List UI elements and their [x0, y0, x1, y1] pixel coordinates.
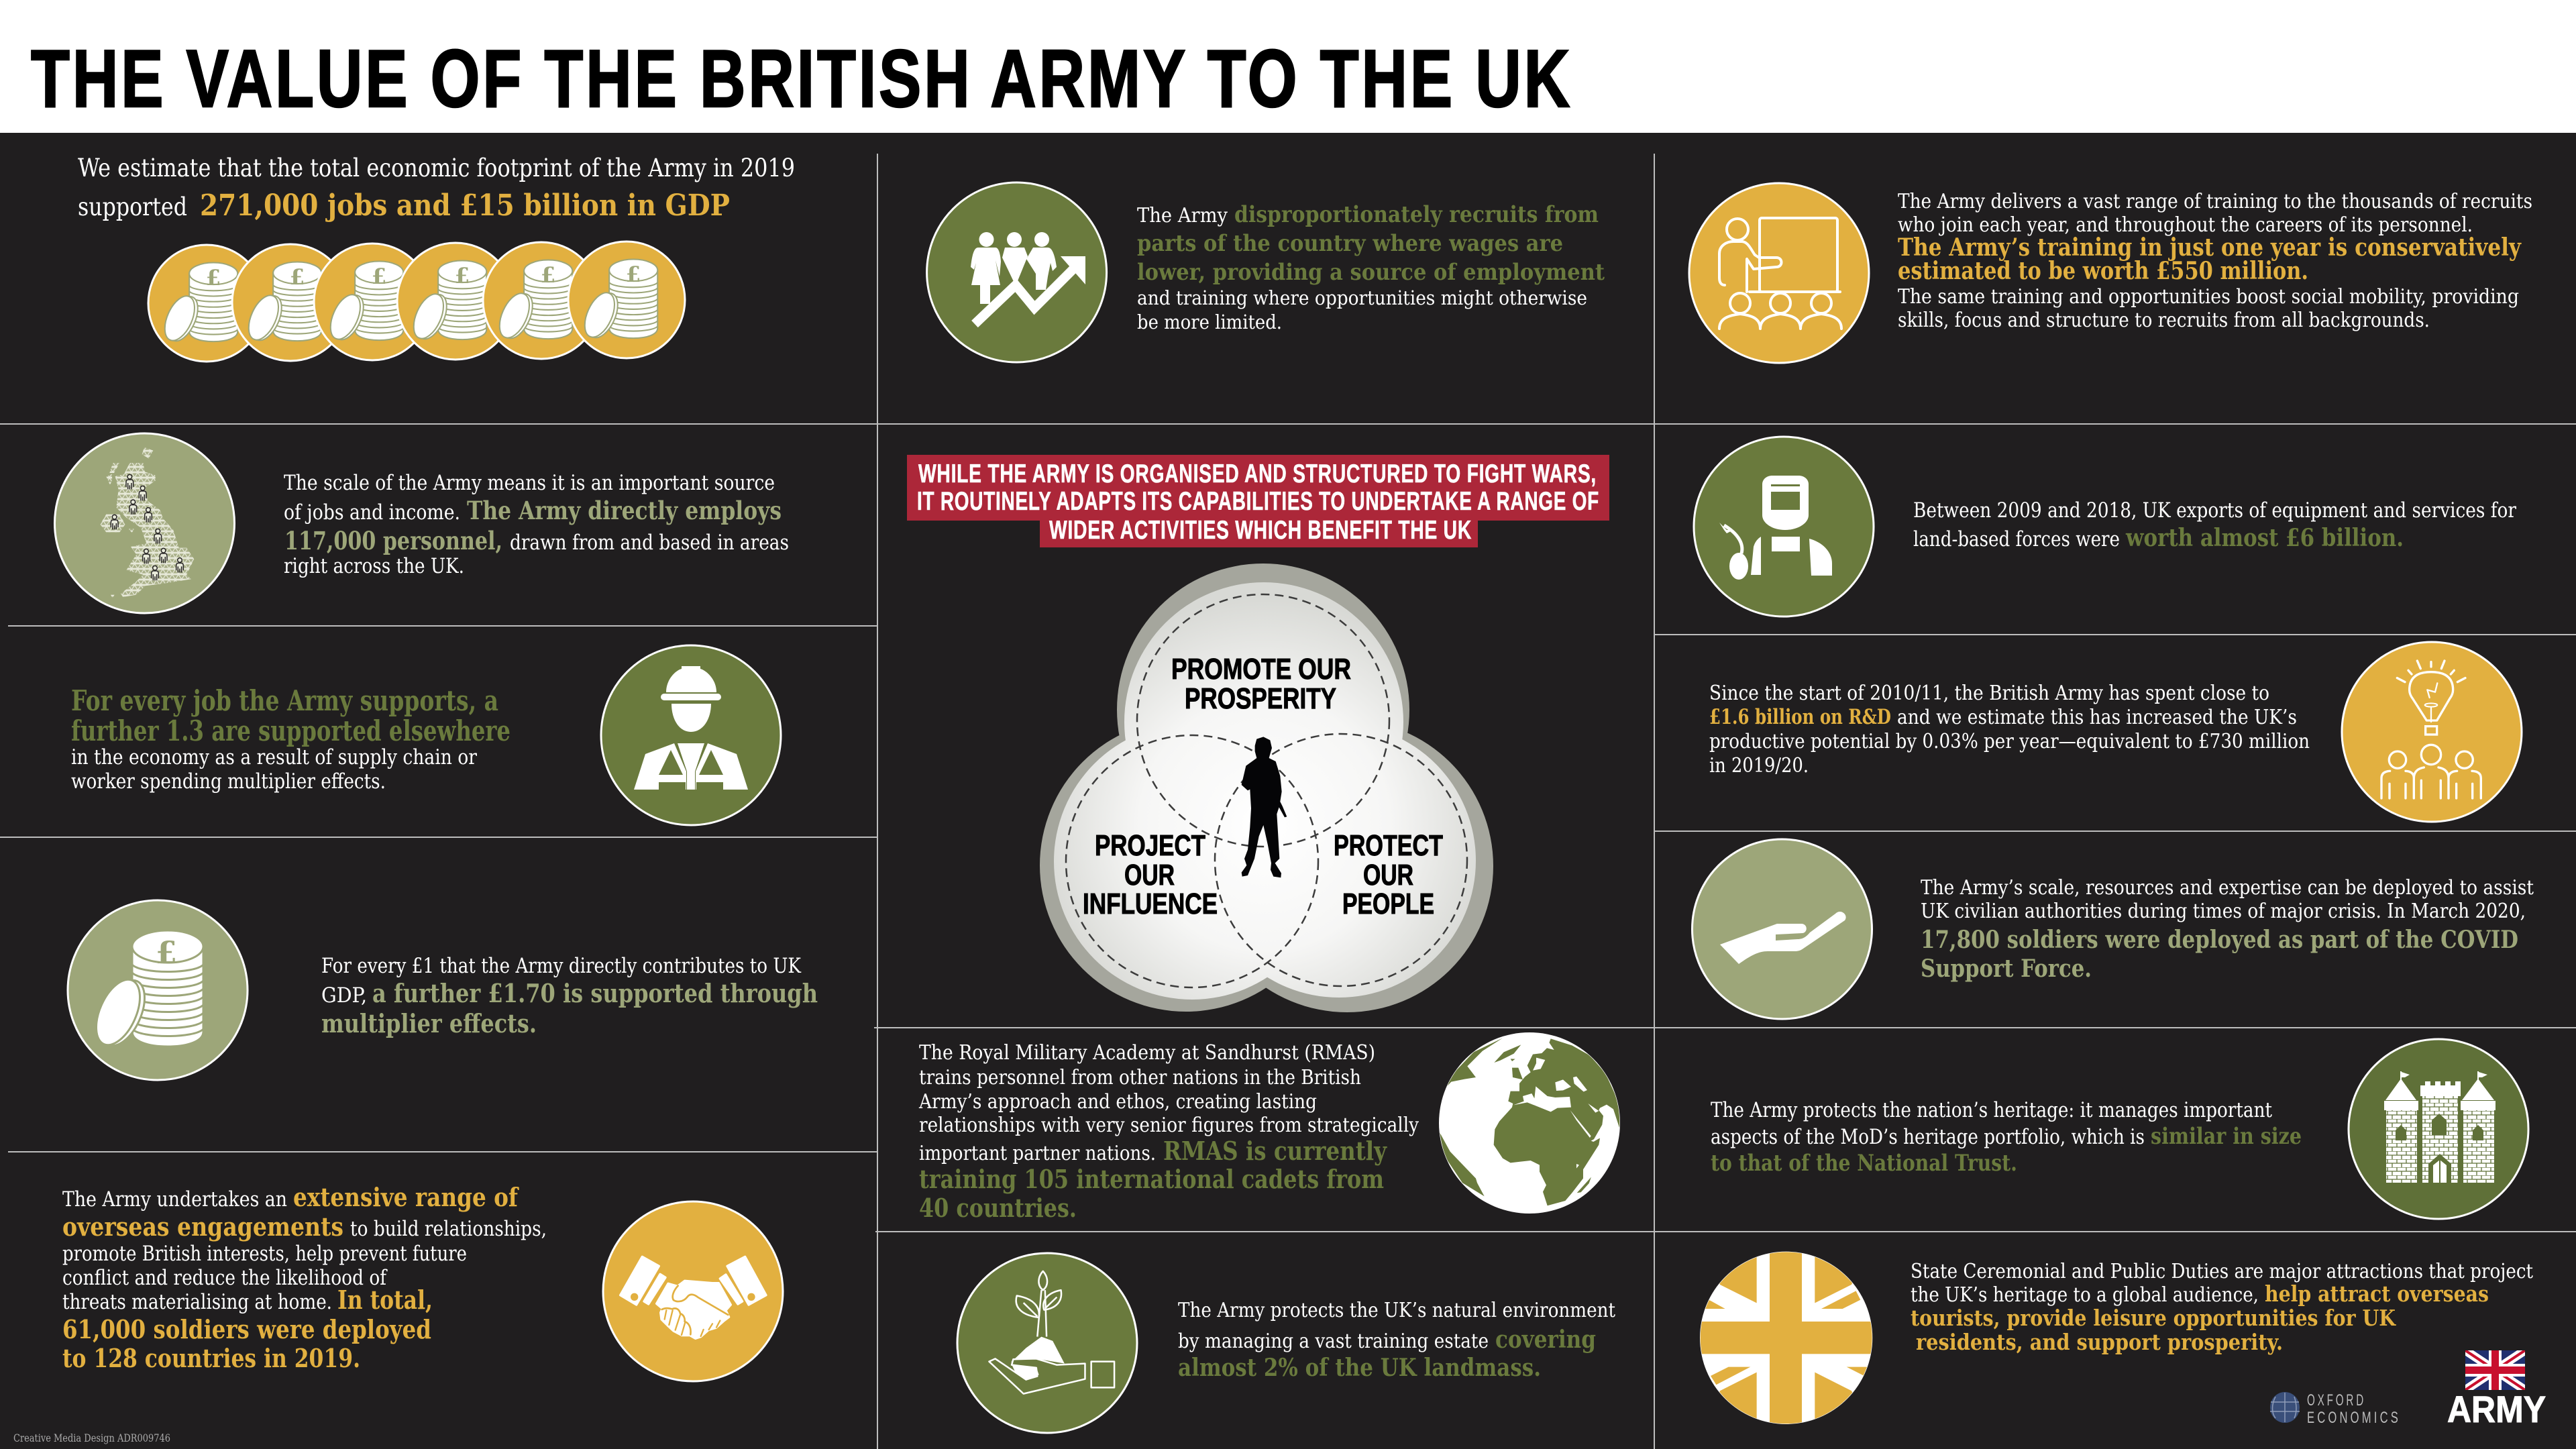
text: overseas engagements: extensive range of: [293, 1182, 519, 1212]
text: GDP multiplier: GDP,: [321, 983, 367, 1008]
text: natural environment: covering: [1495, 1326, 1596, 1354]
text: sandhurst: [918, 1041, 1419, 1223]
text: training value: The same training and opportunities boost social mobility, providing: [1898, 285, 2519, 309]
logo: Oxford Economics: ECONOMICS: [2307, 1409, 2401, 1427]
text: overseas engagements: to build relationships,: [350, 1217, 547, 1241]
icon: row of six coin stacks: [148, 241, 685, 362]
logo: Oxford Economics: OXFORD: [2307, 1391, 2366, 1409]
logo: British Army: [2447, 1350, 2546, 1430]
text: research and development: £1.6 billion on R&D: [1709, 705, 1891, 729]
text: overseas engagements: promote British interests, help prevent future: [62, 1242, 467, 1266]
text: overseas engagements: conflict and reduce the likelihood of: [62, 1266, 388, 1290]
text: GDP multiplier: For every £1 that the Army directly contributes to UK: [321, 954, 802, 978]
icon: row of six coin stacks: £: [626, 262, 641, 287]
text: GDP multiplier: multiplier effects.: [321, 1008, 537, 1038]
text: research and development: productive potential by 0.03% per year—equivalent to £730 million: [1709, 730, 2310, 753]
text: sandhurst: The Royal Military Academy at Sandhurst (RMAS): [919, 1041, 1375, 1065]
text: sandhurst: trains personnel from other nations in the British: [919, 1066, 1361, 1089]
text: jobs multiplier: further 1.3 are supported elsewhere: [71, 714, 511, 747]
text: research and development: Since the start of 2010/11, the British Army has spent close to: [1709, 682, 2269, 705]
text: jobs multiplier: [71, 684, 511, 794]
label: protect our people: PEOPLE: [1342, 888, 1434, 920]
text: training value: [1898, 190, 2532, 332]
text: natural environment: The Army protects the UK’s natural environment: [1178, 1299, 1615, 1322]
label: protect our people: [1334, 829, 1443, 920]
text: research and development: in 2019/20.: [1709, 754, 1809, 777]
panel: recruitment: [927, 182, 1605, 362]
text: direct employment: The Army directly employs: [467, 496, 782, 525]
text: overseas engagements: to 128 countries in 2019.: [62, 1343, 360, 1373]
panel: exports: [1694, 437, 2516, 616]
panel: jobs multiplier: [71, 645, 781, 825]
icon: hand holding seedling: [957, 1253, 1137, 1433]
panel: sandhurst: [918, 1032, 1621, 1223]
label: protect our people: PROTECT: [1334, 829, 1443, 862]
text: ceremonial duties: [1911, 1260, 2533, 1355]
label: project our influence: [1083, 829, 1218, 920]
text: heritage: [1711, 1098, 2302, 1177]
text: exports: [1913, 498, 2516, 552]
text: recruitment: parts of the country where wages are: [1137, 230, 1563, 257]
text: ceremonial duties: the UK’s heritage to a global audience,: [1911, 1283, 2259, 1307]
text: sandhurst: training 105 international cadets from: [919, 1164, 1384, 1194]
text: economic footprint: supported: [78, 193, 187, 221]
text: recruitment: [1137, 201, 1605, 333]
icon: welder: [1694, 437, 1874, 616]
text: heritage: similar in size: [2151, 1123, 2302, 1150]
text: GDP multiplier: [321, 954, 818, 1038]
text: direct employment: [284, 471, 789, 578]
banner: red headline: IT ROUTINELY ADAPTS ITS CAPABILITIES TO UNDERTAKE A RANGE OF: [917, 487, 1599, 516]
text: direct employment: of jobs and income.: [284, 500, 460, 525]
text: training value: who join each year, and throughout the careers of its personnel.: [1898, 213, 2473, 237]
text: overseas engagements: In total,: [337, 1285, 433, 1315]
icon: open hand: [1692, 839, 1872, 1019]
icon: soldier silhouette: [1242, 737, 1287, 877]
text: overseas engagements: [62, 1182, 547, 1373]
text: ceremonial duties: tourists, provide leisure opportunities for UK: [1911, 1305, 2396, 1331]
panel: heritage: [1711, 1039, 2528, 1219]
text: jobs multiplier: worker spending multiplier effects.: [71, 769, 386, 794]
panel: natural environment: [957, 1253, 1615, 1433]
text: heritage: to that of the National Trust.: [1711, 1150, 2017, 1177]
text: sandhurst: RMAS is currently: [1163, 1136, 1387, 1166]
logo: British Army: ARMY: [2447, 1388, 2546, 1430]
text: natural environment: by managing a vast training estate: [1178, 1330, 1489, 1353]
text: recruitment: The Army: [1137, 204, 1228, 227]
text: economic footprint: [78, 154, 795, 223]
icon: row of six coin stacks: £: [455, 263, 470, 288]
panel: research and development: [1709, 642, 2522, 822]
text: overseas engagements: 61,000 soldiers were deployed: [62, 1314, 431, 1344]
text: recruitment: disproportionately recruits from: [1234, 201, 1599, 228]
logo: Oxford Economics: [2270, 1391, 2401, 1427]
icon: UK map with people: [55, 433, 235, 613]
panel: training value: [1689, 183, 2532, 363]
label: protect our people: OUR: [1363, 859, 1413, 892]
text: research and development: [1709, 682, 2310, 777]
text: research and development: and we estimate this has increased the UK’s: [1897, 706, 2297, 729]
panel: crisis support: [1692, 839, 2534, 1019]
label: project our influence: OUR: [1124, 859, 1175, 892]
text: direct employment: drawn from and based in areas: [510, 531, 789, 555]
panel: GDP multiplier: [68, 900, 818, 1080]
label: project our influence: PROJECT: [1095, 829, 1205, 862]
text: overseas engagements: overseas engagements: [62, 1212, 343, 1242]
text: jobs multiplier: For every job the Army supports, a: [71, 684, 498, 717]
text: GDP multiplier: a further £1.70 is supported through: [372, 978, 818, 1008]
text: crisis support: Support Force.: [1921, 955, 2092, 983]
title: THE VALUE OF THE BRITISH ARMY TO THE UK: [31, 33, 1572, 124]
text: sandhurst: important partner nations.: [919, 1142, 1156, 1165]
text: natural environment: almost 2% of the UK landmass.: [1178, 1354, 1541, 1382]
text: sandhurst: Army’s approach and ethos, creating lasting: [918, 1090, 1317, 1114]
icon: coin stack: [68, 900, 248, 1080]
label: project our influence: INFLUENCE: [1083, 888, 1218, 920]
text: sandhurst: 40 countries.: [919, 1193, 1077, 1223]
text: recruitment: be more limited.: [1137, 311, 1282, 333]
icon: row of six coin stacks: £: [541, 262, 555, 288]
text: overseas engagements: The Army undertakes an: [62, 1187, 287, 1212]
credit line: Creative Media Design ADR009746: [13, 1432, 170, 1444]
panel: overseas engagements: [62, 1182, 783, 1381]
text: exports: land-based forces were: [1913, 527, 2120, 551]
icon: union flag: [1697, 1249, 1876, 1428]
icon: globe: [1439, 1032, 1621, 1214]
text: economic footprint: 271,000 jobs and £15 billion in GDP: [200, 189, 730, 223]
panel: ceremonial duties: [1697, 1249, 2533, 1428]
text: ceremonial duties: residents, and support prosperity.: [1916, 1329, 2283, 1355]
text: exports: worth almost £6 billion.: [2125, 524, 2404, 552]
text: direct employment: The scale of the Army means it is an important source: [284, 471, 775, 495]
label: promote our prosperity: [1171, 653, 1351, 715]
text: crisis support: [1921, 876, 2534, 983]
label: promote our prosperity: PROSPERITY: [1185, 682, 1336, 715]
icon: trainer with students: [1689, 183, 1869, 363]
text: training value: estimated to be worth £550 million.: [1898, 257, 2308, 285]
text: recruitment: lower, providing a source of employment: [1137, 259, 1605, 286]
text: jobs multiplier: in the economy as a result of supply chain or: [71, 745, 477, 769]
icon: row of six coin stacks: £: [290, 264, 305, 290]
panel: direct employment: [55, 433, 789, 613]
text: natural environment: [1178, 1299, 1615, 1382]
banner: red headline: WHILE THE ARMY IS ORGANISED AND STRUCTURED TO FIGHT WARS,: [918, 460, 1597, 488]
text: direct employment: 117,000 personnel,: [284, 526, 502, 555]
icon: people and rising arrow: [927, 182, 1107, 362]
text: heritage: aspects of the MoD’s heritage portfolio, which is: [1711, 1125, 2145, 1149]
icon: construction worker: [601, 645, 781, 825]
icon: handshake: [603, 1201, 783, 1381]
label: promote our prosperity: PROMOTE OUR: [1171, 653, 1351, 686]
text: sandhurst: relationships with very senior figures from strategically: [919, 1114, 1419, 1137]
text: economic footprint: We estimate that the total economic footprint of the Army in 2019: [78, 154, 795, 182]
banner: red headline: WIDER ACTIVITIES WHICH BENEFIT THE UK: [1049, 516, 1472, 545]
banner: red headline: [907, 455, 1609, 547]
text: recruitment: and training where opportunities might otherwise: [1137, 286, 1587, 309]
icon: row of six coin stacks: £: [206, 265, 221, 290]
text: direct employment: right across the UK.: [284, 554, 464, 578]
icon: row of six coin stacks: £: [372, 264, 386, 289]
text: ceremonial duties: help attract overseas: [2265, 1281, 2489, 1307]
icon: coin stack: £: [156, 934, 177, 971]
icon: castle: [2349, 1039, 2528, 1219]
text: heritage: The Army protects the nation’s heritage: it manages important: [1711, 1098, 2272, 1122]
panel: economic footprint: [78, 154, 795, 362]
text: training value: skills, focus and structure to recruits from all backgrounds.: [1898, 309, 2430, 332]
chart: three-circle venn diagram: [1040, 564, 1493, 1012]
icon: light bulb and people: [2342, 642, 2522, 822]
text: overseas engagements: threats materialising at home.: [62, 1290, 332, 1314]
